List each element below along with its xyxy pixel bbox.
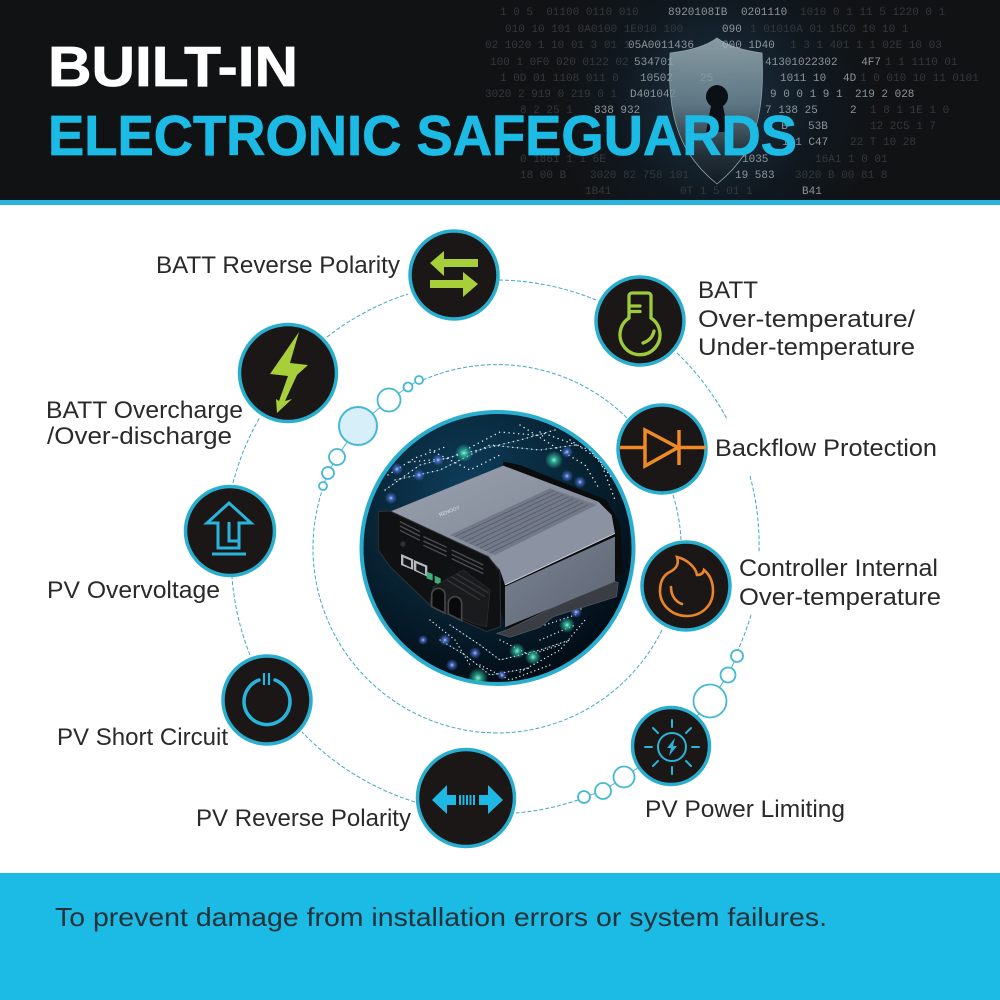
icon: BATT reverse polarity [410, 231, 498, 319]
label: BATT temperature [698, 277, 915, 361]
background code digits: B41 [802, 186, 822, 198]
icon: sun with bolt [632, 708, 710, 784]
icon: lightning bolt [240, 324, 336, 422]
icon: double arrow PV reverse polarity [418, 750, 514, 846]
background code digits: 838 932 [594, 105, 640, 117]
background code digits: 4D [843, 73, 857, 85]
background code digits: 1 B [768, 121, 788, 133]
device label text: RENOGY [438, 505, 461, 519]
background code digits: 1010 0 1 11 5 1220 0 1 [800, 7, 946, 19]
title: BUILT-IN [48, 35, 298, 99]
background code digits [485, 7, 979, 198]
background code digits: 1 0 010 10 11 0101 [860, 73, 979, 85]
background code digits: 1 01010A 01 15C0 10 10 1 [750, 24, 909, 36]
label: controller internal over-temperature: Controller Internal [739, 555, 938, 582]
background code digits: 22 T 10 28 [850, 137, 916, 149]
label: PV power limiting: PV Power Limiting [645, 796, 845, 823]
background code digits: 19 583 [735, 170, 775, 182]
label: BATT overcharge [46, 397, 243, 450]
background code digits: 1035 [742, 154, 768, 166]
background code digits: 1 8 1 1E 1 0 [870, 105, 949, 117]
background code digits: 090 [722, 24, 742, 36]
bubbles upper left [319, 376, 423, 490]
background code digits: 100 1 0F0 020 0122 02 [490, 57, 629, 69]
label: BATT temperature: BATT [698, 277, 758, 304]
background code digits: 25 [700, 73, 713, 85]
background code digits: 1 0 5 01100 0110 010 [500, 7, 639, 19]
background code digits: 000 1D40 [722, 40, 775, 52]
background code digits: 05A0011436 [628, 40, 694, 52]
starfield [385, 425, 615, 688]
background code digits: 3020 B 00 81 8 [795, 170, 887, 182]
label: backflow protection: Backflow Protection [715, 435, 937, 462]
background code digits: 41301022302 [765, 57, 838, 69]
background code digits: 3020 2 919 0 219 0 1 [485, 89, 617, 101]
icon: flame [642, 542, 730, 630]
background code digits: 4F7 [848, 57, 881, 69]
footer text: To prevent damage from installation errors or system failures. [55, 902, 827, 932]
centre photo: charge controller on starfield [362, 412, 634, 688]
background code digits: 0201110 [741, 7, 787, 19]
background code digits: 53B [808, 121, 828, 133]
background code digits: D401042 [630, 89, 676, 101]
icon: power button [223, 656, 311, 744]
background code digits: 1B41 [585, 186, 612, 198]
background code digits: 0 1861 1 1 6E [520, 154, 606, 166]
background code digits: 16A1 1 0 01 [815, 154, 888, 166]
background code digits: 3020 82 758 101 [590, 170, 689, 182]
background code digits: 1 3 1 401 1 1 02E 10 03 [790, 40, 942, 52]
icon: battery temperature bulb [596, 277, 684, 365]
icon: diode backflow [618, 405, 706, 493]
background code digits: 18 00 B [520, 170, 567, 182]
background code digits: 2 [850, 105, 857, 117]
background code digits: 1011 10 [780, 73, 826, 85]
header band [0, 0, 1000, 205]
label: BATT temperature: Over-temperature/ [698, 306, 915, 333]
device body [378, 462, 623, 637]
background code digits: 8920108IB [668, 7, 728, 19]
footer band [0, 873, 1000, 1000]
background code digits: 010 10 101 0A0100 1E010 100 [505, 24, 683, 36]
label: BATT reverse polarity: BATT Reverse Polarity [156, 252, 400, 279]
background code digits: 8 2 25 1 [520, 105, 573, 117]
label: BATT overcharge: BATT Overcharge [46, 397, 243, 424]
background code digits: 12 2C5 1 7 [870, 121, 936, 133]
background code digits: 9 0 0 1 9 1 [770, 89, 843, 101]
background code digits: 1 1 1110 01 [885, 57, 958, 69]
icon: shield with keyhole [670, 38, 762, 184]
label: PV overvoltage: PV Overvoltage [47, 577, 220, 604]
label: PV reverse polarity: PV Reverse Polarity [196, 805, 411, 832]
title [48, 35, 797, 168]
background code digits: 10502 [640, 73, 673, 85]
background code digits: 219 2 028 [855, 89, 914, 101]
label: BATT overcharge: /Over-discharge [47, 423, 232, 450]
orbit dashed rings [232, 280, 759, 813]
title: ELECTRONIC SAFEGUARDS [48, 104, 797, 168]
background code digits: 0T 1 5 01 1 [680, 186, 753, 198]
background code digits: 534701 [634, 57, 674, 69]
label: BATT temperature: Under-temperature [698, 334, 915, 361]
background code digits: 02 1020 1 10 01 3 01 1 [485, 40, 631, 52]
background code digits: 1 0D 01 1108 011 0 [500, 73, 619, 85]
background code digits: 101 C47 [782, 137, 828, 149]
background code digits: 7 138 25 [765, 105, 818, 117]
label: controller internal over-temperature: Over-temperature [739, 584, 941, 611]
icon: upload arrow PV overvoltage [186, 486, 274, 576]
label: PV short circuit: PV Short Circuit [57, 724, 228, 751]
label: controller internal over-temperature [739, 555, 941, 611]
bubbles lower right [578, 650, 743, 803]
